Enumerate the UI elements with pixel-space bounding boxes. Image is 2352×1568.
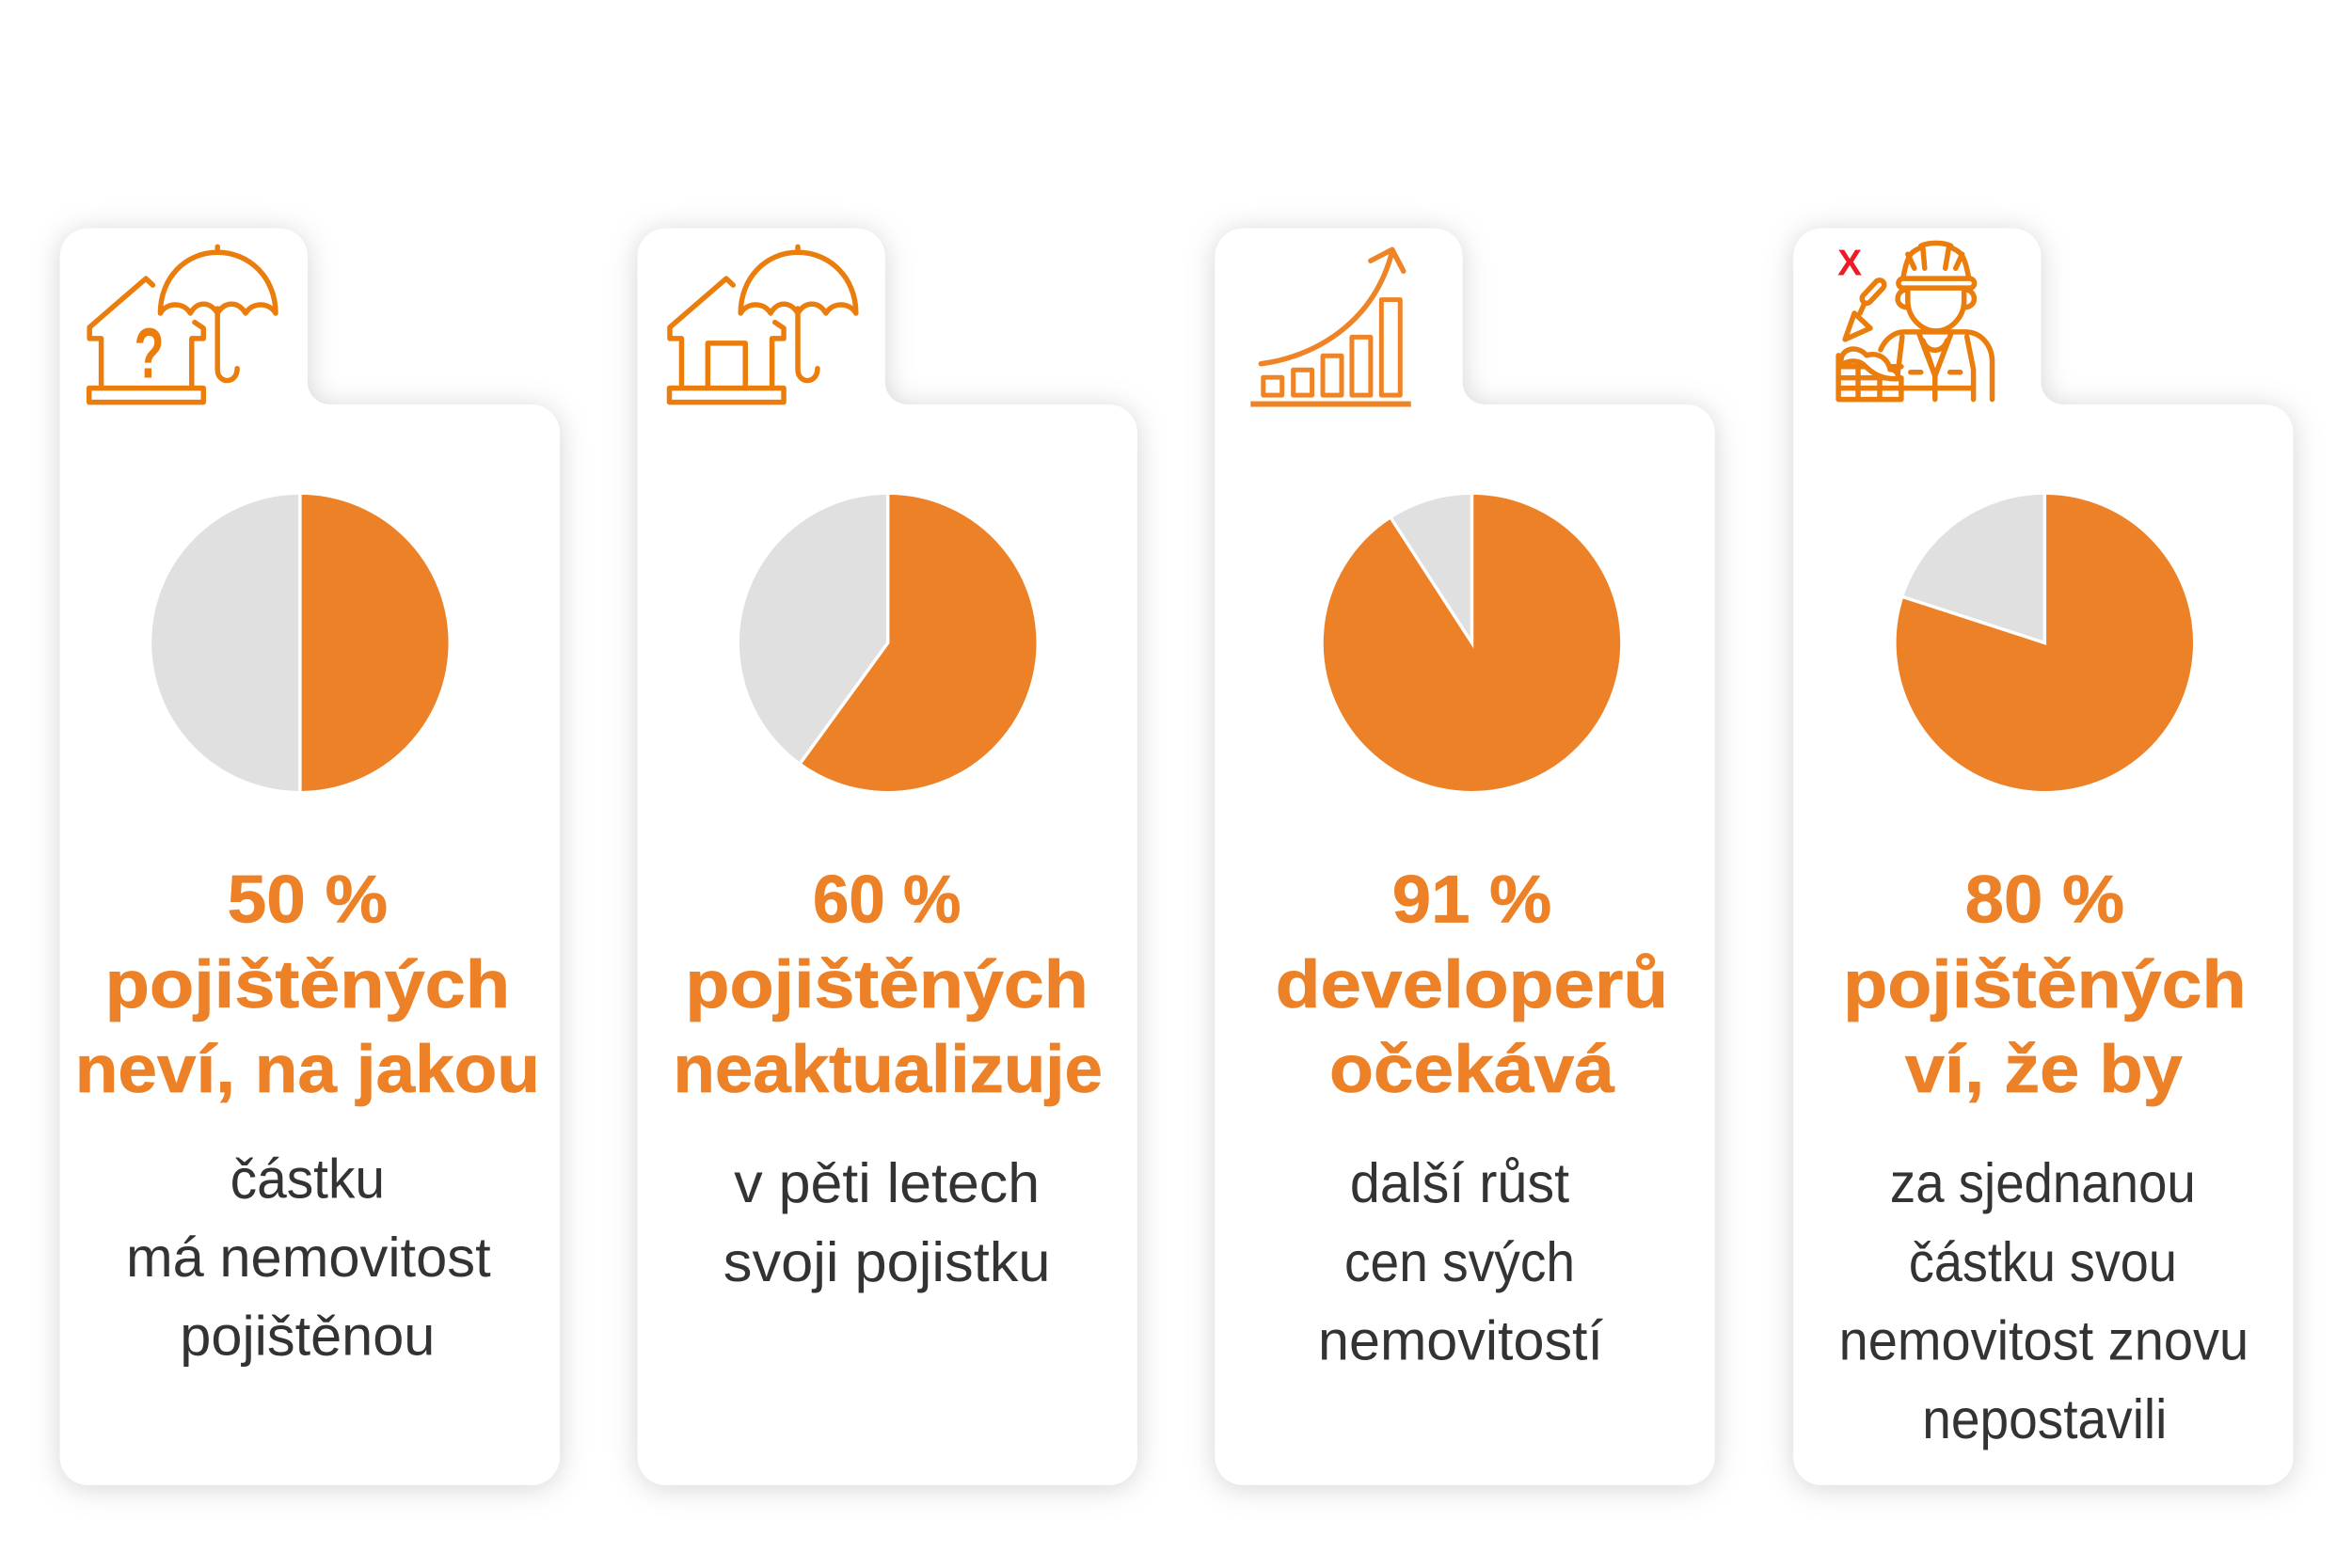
heading: 60 % pojištěných neaktualizuje: neaktualizuje	[673, 1032, 1103, 1107]
body text: částku má nemovitost pojištěnou	[126, 1147, 491, 1368]
card background	[1793, 229, 2293, 1485]
heading: 91 % developerů očekává: developerů	[1276, 947, 1668, 1022]
body text: za sjednanou částku svou nemovitost znovu nepostavili	[1839, 1151, 2249, 1450]
heading: 60 % pojištěných neaktualizuje	[673, 863, 1103, 1107]
icon: house with question mark and umbrella: ?	[134, 314, 164, 394]
panel: 91 % developers	[1215, 229, 1715, 1485]
icon: construction worker with trowel and bricks	[1837, 243, 1993, 400]
body text: další růst cen svých nemovitostí: cen svých	[1344, 1230, 1575, 1293]
body text: další růst cen svých nemovitostí	[1318, 1151, 1603, 1371]
pie chart: 91 %	[1322, 493, 1622, 793]
body text: za sjednanou částku svou nemovitost znovu nepostavili: částku svou	[1909, 1230, 2177, 1293]
body text: částku má nemovitost pojištěnou: pojištěnou	[180, 1305, 435, 1368]
heading: 91 % developerů očekává: 91 %	[1392, 863, 1551, 938]
card background	[1215, 229, 1715, 1485]
panel: 60 % insured	[638, 229, 1137, 1485]
heading: 50 % pojištěných neví, na jakou: neví, na jakou	[75, 1032, 540, 1107]
heading: 60 % pojištěných neaktualizuje: pojištěných	[685, 947, 1089, 1022]
body text: v pěti letech svoji pojistku	[723, 1151, 1051, 1293]
heading: 80 % pojištěných ví, že by: 80 %	[1965, 863, 2124, 938]
heading: 80 % pojištěných ví, že by: ví, že by	[1905, 1032, 2183, 1107]
heading: 91 % developerů očekává: očekává	[1329, 1032, 1615, 1107]
icon: house with door and umbrella	[669, 246, 856, 403]
body text: částku má nemovitost pojištěnou: má nemovitost	[126, 1226, 491, 1289]
heading: 80 % pojištěných ví, že by	[1843, 863, 2247, 1107]
panel: 80 % insured	[1793, 229, 2293, 1485]
body text: za sjednanou částku svou nemovitost znovu nepostavili: za sjednanou	[1890, 1151, 2196, 1214]
icon: red cross mark: X	[1837, 244, 1862, 284]
pie chart: 80 %	[1895, 493, 2195, 793]
body text: další růst cen svých nemovitostí: nemovitostí	[1318, 1309, 1603, 1371]
card background	[60, 229, 560, 1485]
body text: za sjednanou částku svou nemovitost znovu nepostavili: nemovitost znovu	[1839, 1309, 2249, 1371]
body text: další růst cen svých nemovitostí: další růst	[1350, 1151, 1570, 1214]
body text: v pěti letech svoji pojistku: v pěti letech	[734, 1151, 1040, 1214]
pie chart: 50 %	[150, 493, 450, 793]
card background	[638, 229, 1137, 1485]
heading: 50 % pojištěných neví, na jakou	[75, 863, 540, 1107]
icon: house with question mark and umbrella	[89, 246, 276, 403]
heading: 80 % pojištěných ví, že by: pojištěných	[1843, 947, 2247, 1022]
body text: za sjednanou částku svou nemovitost znovu nepostavili: nepostavili	[1922, 1387, 2167, 1450]
heading: 50 % pojištěných neví, na jakou: 50 %	[228, 863, 388, 938]
icon: rising bar chart with arrow	[1250, 249, 1411, 407]
pie chart: 60 %	[738, 493, 1038, 793]
heading: 60 % pojištěných neaktualizuje: 60 %	[813, 863, 961, 938]
heading: 91 % developerů očekává	[1276, 863, 1668, 1107]
body text: částku má nemovitost pojištěnou: částku	[230, 1147, 385, 1210]
heading: 50 % pojištěných neví, na jakou: pojištěných	[105, 947, 510, 1022]
panel: 50 % insured	[60, 229, 560, 1485]
body text: v pěti letech svoji pojistku: svoji pojistku	[723, 1230, 1051, 1293]
